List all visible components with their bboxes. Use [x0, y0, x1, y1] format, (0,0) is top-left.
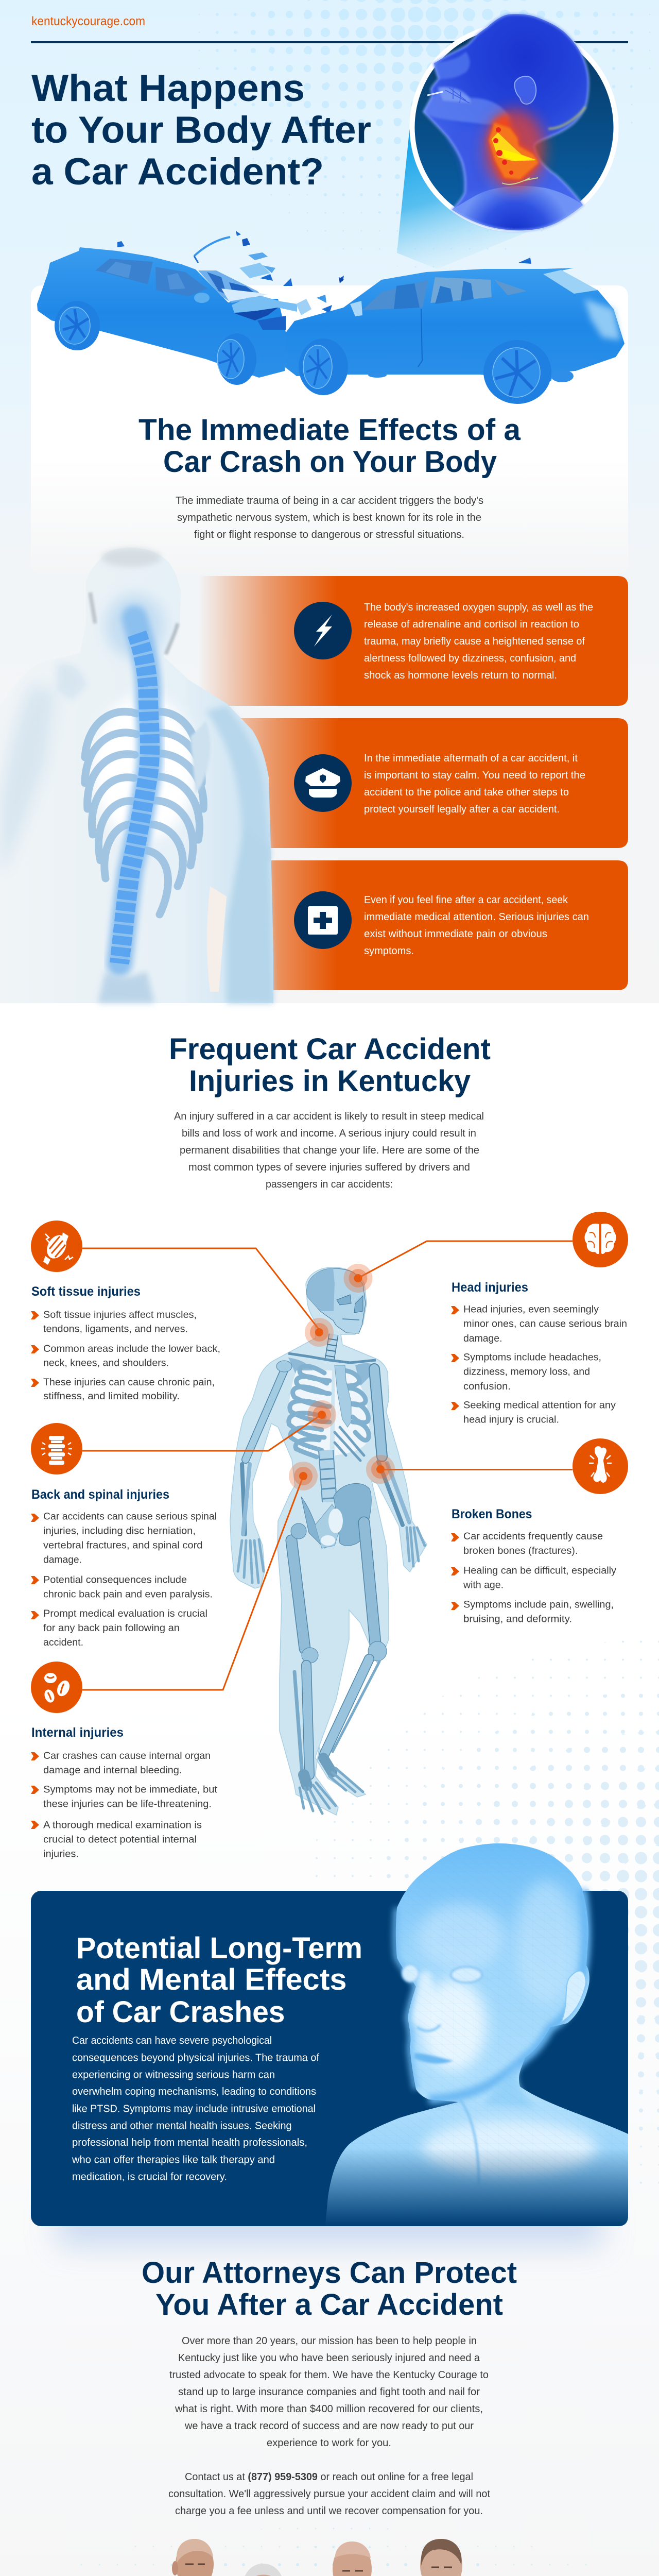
- injury text: soft tissue: These injuries can cause chronic pain,: [43, 1377, 215, 1388]
- paragraph: our mission: we have a track record of success and are now ready to put our: [184, 2420, 474, 2432]
- injury text: soft tissue: Common areas include the lower back,: [43, 1344, 220, 1354]
- panel: oxygen and adrenaline: shock as hormone levels return to normal.: [364, 670, 557, 681]
- panel: report to police: accident to the police and take other steps to: [364, 787, 569, 798]
- intro paragraph: immediate effects: [176, 495, 483, 540]
- image: right car: [285, 258, 625, 404]
- main title: to Your Body After: [31, 109, 371, 151]
- intro paragraph: injuries: most common types of severe injuries suffered by drivers and: [188, 1162, 470, 1173]
- injury text: broken bones: Healing can be difficult, especially: [463, 1566, 617, 1577]
- injury text: broken bones: bruising, and deformity.: [463, 1614, 572, 1625]
- injury text: internal: these injuries can be life-threatening.: [43, 1799, 212, 1810]
- injury text: broken bones: broken bones (fractures).: [463, 1546, 578, 1556]
- injury text: head: Symptoms include headaches,: [463, 1352, 601, 1363]
- image: left crashed car: [37, 231, 344, 385]
- panel: seek medical attention: immediate medical attention. Serious injuries can: [364, 911, 589, 923]
- injury text: internal: crucial to detect potential internal: [43, 1834, 197, 1845]
- connector: back and spine: [82, 1415, 321, 1451]
- website address: kentuckycourage.com: [31, 14, 145, 28]
- paragraph: our mission: Kentucky just like you who have been seriously injured and need a: [178, 2352, 480, 2364]
- panel: seek medical attention: [198, 860, 628, 990]
- paragraph: long-term effects: who can offer therapies like talk therapy and: [72, 2155, 275, 2166]
- icon: blood cells: [31, 1662, 82, 1713]
- heading: long-term effects: and Mental Effects: [76, 1963, 347, 1996]
- main title: a Car Accident?: [31, 151, 324, 193]
- injury text: back and spine: Back and spinal injuries: [31, 1487, 169, 1502]
- paragraph: contact: Contact us at (877) 959-5309 or reach out online for a free legal: [185, 2471, 473, 2483]
- icon: medical cross: [294, 891, 352, 949]
- injury text: soft tissue: Soft tissue injuries: [31, 1284, 141, 1299]
- heading: frequent injuries: Injuries in Kentucky: [189, 1064, 471, 1098]
- paragraph: contact: consultation. We'll aggressively pursue your accident claim and will not: [168, 2488, 490, 2500]
- image: whiplash head in circle: [412, 14, 616, 230]
- intro paragraph: injuries: bills and loss of work and income. A serious injury could result in: [182, 1128, 476, 1139]
- intro paragraph: immediate effects: sympathetic nervous system, which is best known for its role in the: [177, 512, 481, 523]
- paragraph: long-term effects: distress and other mental health issues. Seeking: [72, 2121, 291, 2132]
- icon: broken bone: [573, 1438, 628, 1494]
- paragraph: our mission: trusted advocate to speak for them. We have the Kentucky Courage to: [169, 2369, 489, 2381]
- injury text: internal: A thorough medical examination is: [43, 1820, 202, 1831]
- paragraph: long-term effects: consequences beyond physical injuries. The trauma of: [72, 2053, 319, 2064]
- connector: head: [358, 1241, 573, 1278]
- paragraph: our mission: experience to work for you.: [267, 2437, 391, 2449]
- injury text: internal: injuries.: [43, 1849, 79, 1860]
- paragraph: long-term effects: overwhelm coping mechanisms, leading to conditions: [72, 2086, 316, 2097]
- heading: frequent injuries: [169, 1032, 491, 1098]
- injury text: soft tissue: stiffness, and limited mobility.: [43, 1391, 180, 1402]
- panel: report to police: In the immediate aftermath of a car accident, it: [364, 753, 578, 764]
- heading: long-term effects: Potential Long-Term: [76, 1931, 362, 1965]
- heading: immediate effects: Car Crash on Your Body: [163, 445, 497, 479]
- panel: seek medical attention: symptoms.: [364, 945, 414, 957]
- injury text: back and spine: Prompt medical evaluation is crucial: [43, 1608, 207, 1619]
- icon: brain: [573, 1212, 628, 1267]
- attorney: front, light grey jacket: [196, 2564, 355, 2576]
- injury text: back and spine: Potential consequences include: [43, 1574, 187, 1585]
- injury text: soft tissue: tendons, ligaments, and nerves.: [43, 1324, 188, 1334]
- panel: oxygen and adrenaline: trauma, may briefly cause a heightened sense of: [364, 636, 585, 647]
- callout cone from crash to head: [397, 126, 538, 269]
- heading: long-term effects: [76, 1931, 362, 2029]
- injury text: soft tissue: [31, 1284, 220, 1402]
- image: translucent back with spine: [0, 548, 273, 1003]
- main title: What Happens: [31, 67, 305, 109]
- paragraph: long-term effects: medication, is crucial for recovery.: [72, 2172, 227, 2183]
- paragraph: our mission: stand up to large insurance companies and fight tooth and nail for: [178, 2386, 480, 2398]
- injury text: back and spine: injuries, including disc herniation,: [43, 1526, 196, 1536]
- attorney: right, grey suit: [405, 2539, 519, 2576]
- intro paragraph: immediate effects: The immediate trauma of being in a car accident triggers the body's: [176, 495, 483, 506]
- injury text: head: dizziness, memory loss, and: [463, 1367, 590, 1378]
- paragraph: contact: [168, 2471, 490, 2517]
- paragraph: our mission: Over more than 20 years, our mission has been to help people in: [182, 2335, 477, 2347]
- panel: oxygen and adrenaline: The body's increased oxygen supply, as well as the: [364, 602, 593, 613]
- main title: [31, 67, 371, 193]
- injury text: broken bones: with age.: [463, 1580, 504, 1591]
- panel: seek medical attention: exist without immediate pain or obvious: [364, 928, 547, 940]
- injury markers on body: [289, 1264, 395, 1490]
- intro paragraph: injuries: passengers in car accidents:: [266, 1179, 393, 1190]
- panel: report to police: protect yourself legally after a car accident.: [364, 804, 560, 815]
- connector: soft tissue: [82, 1248, 319, 1330]
- paragraph: long-term effects: like PTSD. Symptoms may include intrusive emotional: [72, 2103, 316, 2114]
- injury text: back and spine: vertebral fractures, and spinal cord: [43, 1540, 203, 1551]
- panel: oxygen and adrenaline: [198, 576, 628, 706]
- heading: immediate effects: [138, 413, 521, 479]
- header rule: [31, 41, 628, 43]
- heading: long-term effects: of Car Crashes: [76, 1995, 285, 2029]
- injury text: broken bones: [451, 1507, 617, 1625]
- injury text: broken bones: Broken Bones: [452, 1507, 532, 1521]
- heading: immediate effects: The Immediate Effects of a: [138, 413, 521, 447]
- paragraph: long-term effects: professional help from mental health professionals,: [72, 2137, 307, 2148]
- injury text: broken bones: Car accidents frequently cause: [463, 1531, 603, 1542]
- panel: report to police: is important to stay calm. You need to report the: [364, 770, 585, 781]
- injury text: head: confusion.: [463, 1381, 511, 1392]
- injury text: back and spine: accident.: [43, 1637, 83, 1648]
- injury text: head: damage.: [463, 1333, 502, 1344]
- icon: soft tissue muscle: [31, 1221, 82, 1272]
- icon: spine: [31, 1423, 82, 1475]
- connector: internal: [82, 1476, 303, 1690]
- injury text: head: head injury is crucial.: [463, 1415, 559, 1426]
- injury text: back and spine: for any back pain following an: [43, 1623, 180, 1634]
- injury text: head: minor ones, can cause serious brain: [463, 1319, 627, 1330]
- injury text: head: [451, 1280, 627, 1426]
- image: four attorneys: [133, 2539, 519, 2576]
- paragraph: our mission: [169, 2335, 489, 2449]
- intro paragraph: immediate effects: fight or flight response to dangerous or stressful situations.: [194, 529, 464, 540]
- heading: attorneys: [142, 2256, 517, 2321]
- paragraph: long-term effects: experiencing or witnessing serious harm can: [72, 2070, 275, 2081]
- panel: oxygen and adrenaline: release of adrenaline and cortisol in reaction to: [364, 619, 579, 630]
- injury text: soft tissue: neck, knees, and shoulders.: [43, 1358, 169, 1368]
- heading: frequent injuries: Frequent Car Accident: [169, 1032, 491, 1066]
- injury text: back and spine: [31, 1487, 217, 1648]
- panel: long-term effects: [31, 1843, 638, 2236]
- intro paragraph: injuries: An injury suffered in a car accident is likely to result in steep medical: [174, 1111, 484, 1122]
- connector: broken bones: [380, 1469, 573, 1470]
- injury text: head: Head injuries, even seemingly: [463, 1304, 599, 1315]
- injury text: internal: Car crashes can cause internal organ: [43, 1751, 211, 1761]
- injury text: back and spine: chronic back pain and even paralysis.: [43, 1589, 213, 1600]
- heading: attorneys: You After a Car Accident: [155, 2288, 503, 2321]
- intro paragraph: injuries: [174, 1111, 484, 1190]
- heading: attorneys: Our Attorneys Can Protect: [142, 2256, 517, 2290]
- image: anatomical skeleton figure: [230, 1267, 427, 1815]
- intro paragraph: injuries: permanent disabilities that change your life. Here are some of the: [180, 1145, 479, 1156]
- icon: lightning bolt: [294, 602, 352, 659]
- injury text: back and spine: Car accidents can cause serious spinal: [43, 1512, 217, 1522]
- paragraph: our mission: what is right. With more than $400 million recovered for our clients,: [175, 2403, 483, 2415]
- paragraph: contact: charge you a fee unless and until we recover compensation for you.: [175, 2505, 483, 2517]
- injury text: broken bones: Symptoms include pain, swelling,: [463, 1599, 614, 1610]
- injury text: internal: damage and internal bleeding.: [43, 1765, 182, 1776]
- panel: seek medical attention: Even if you feel fine after a car accident, seek: [364, 894, 568, 906]
- panel: report to police: [198, 718, 628, 848]
- white content card: [31, 285, 628, 574]
- attorney: third, navy suit: [302, 2541, 435, 2576]
- panel: oxygen and adrenaline: alertness followed by dizziness, confusion, and: [364, 653, 576, 664]
- injury text: head: Seeking medical attention for any: [463, 1400, 616, 1411]
- injury text: head: Head injuries: [452, 1280, 528, 1295]
- injury text: internal: Symptoms may not be immediate, but: [43, 1785, 218, 1795]
- injury text: soft tissue: Soft tissue injuries affect muscles,: [43, 1310, 197, 1320]
- injury text: back and spine: damage.: [43, 1555, 82, 1566]
- paragraph: long-term effects: [72, 2035, 319, 2183]
- image: wireframe 3D head: [319, 1843, 638, 2236]
- icon: police hat: [294, 754, 352, 812]
- injury text: internal: Internal injuries: [31, 1725, 124, 1740]
- injury text: internal: [31, 1725, 218, 1860]
- attorney: left, navy suit: [133, 2539, 233, 2576]
- paragraph: long-term effects: Car accidents can have severe psychological: [72, 2035, 272, 2046]
